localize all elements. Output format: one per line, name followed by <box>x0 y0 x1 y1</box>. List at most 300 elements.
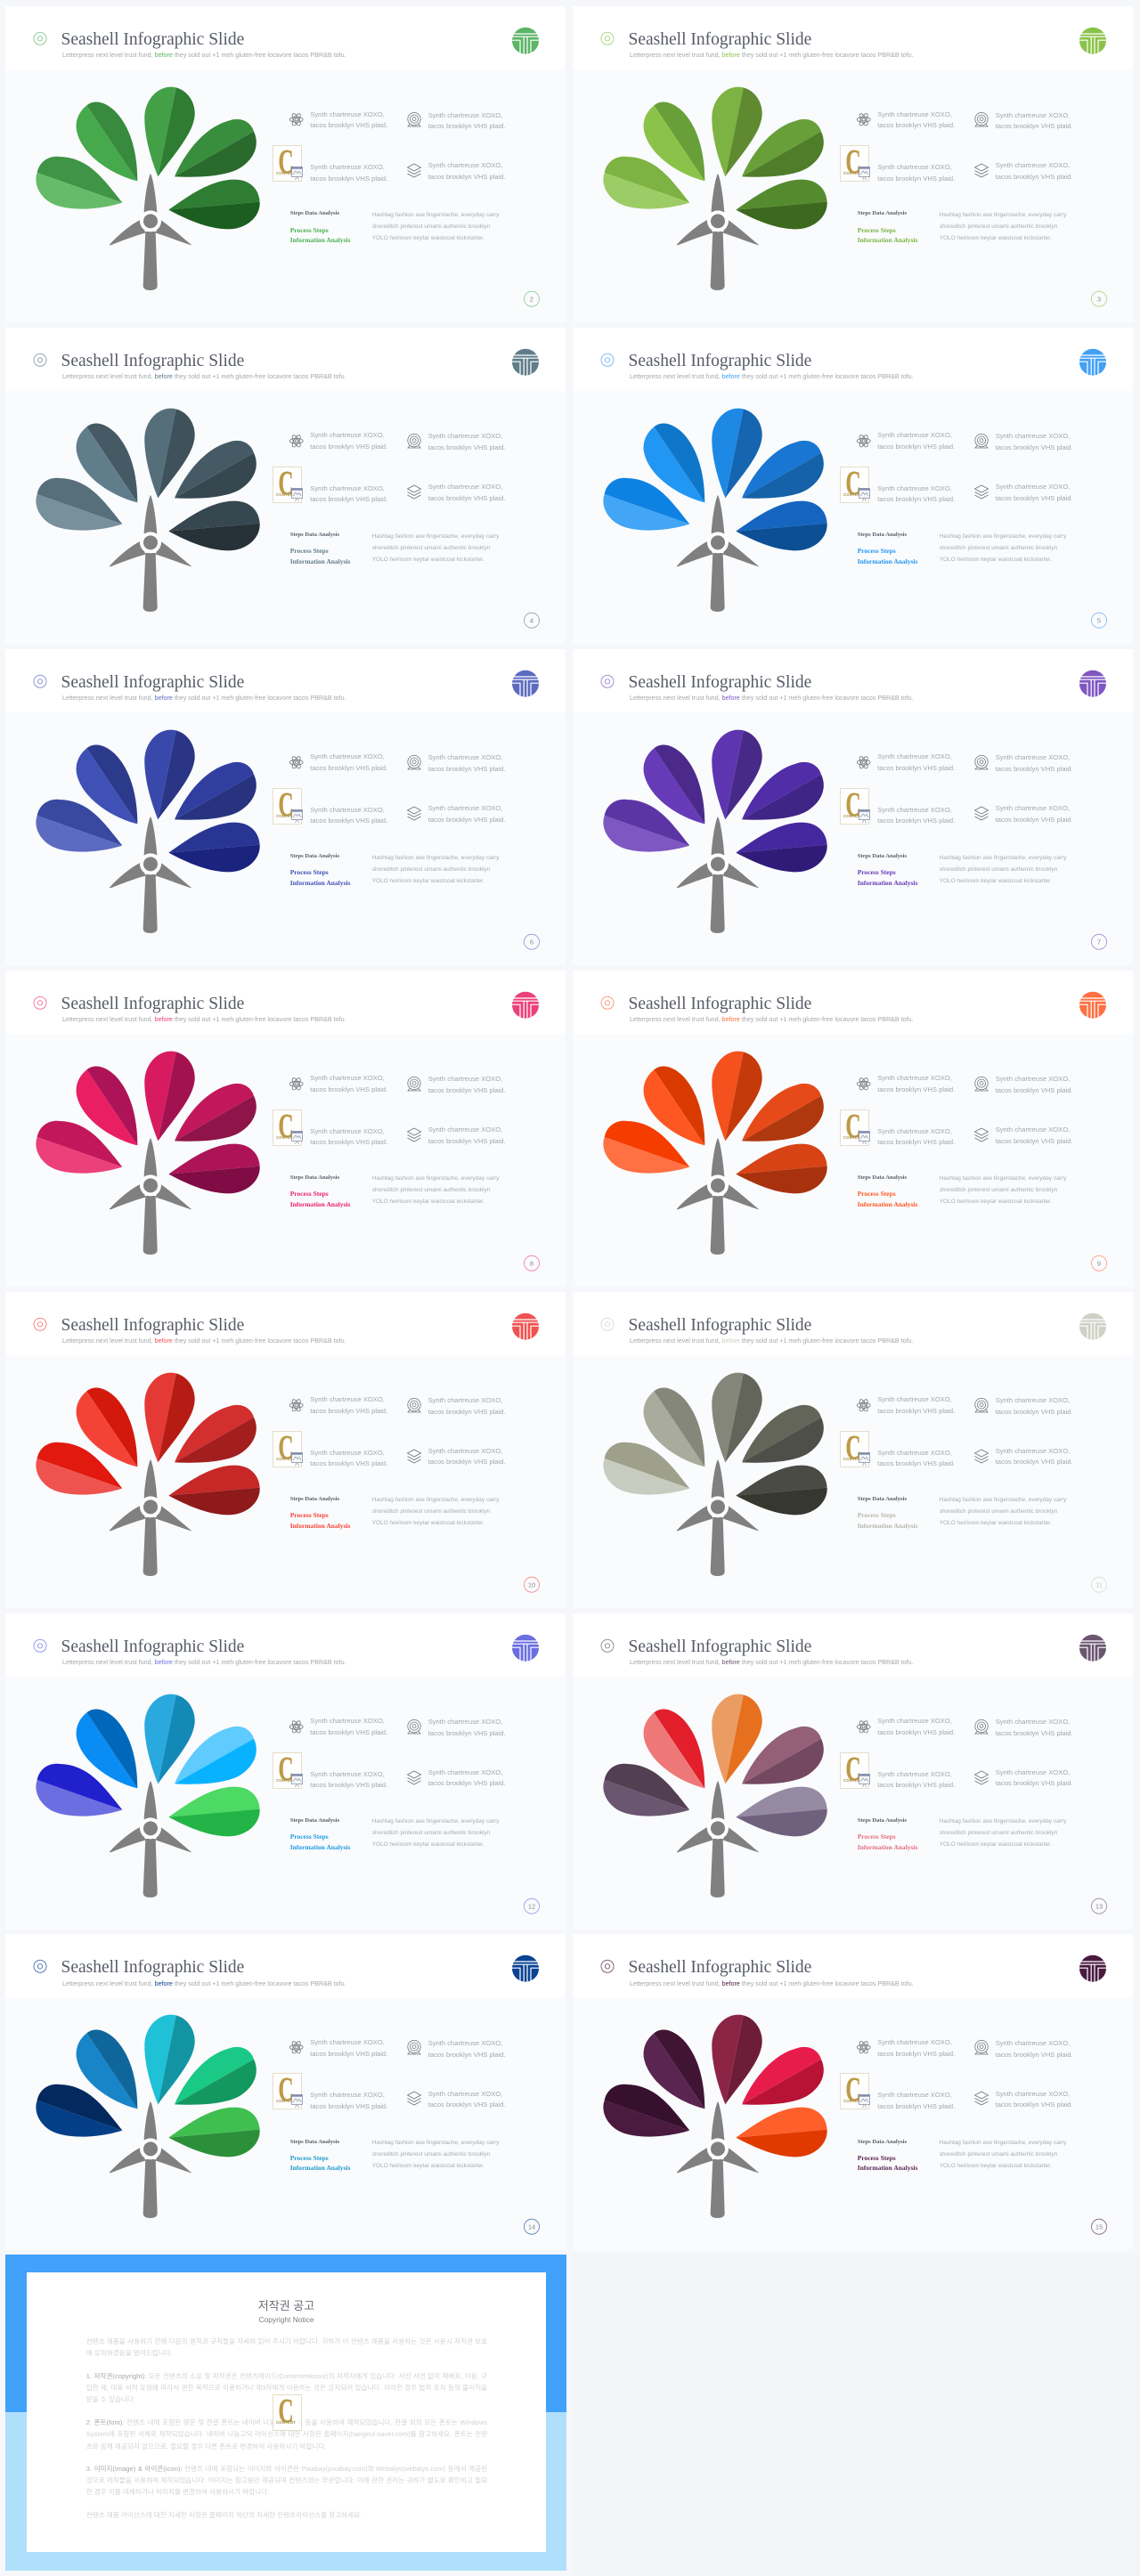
feature text 2 <box>428 1074 506 1096</box>
petal 4 <box>742 119 824 177</box>
feature text 1 <box>310 2037 387 2060</box>
heading: Seashell Infographic Slide <box>61 995 244 1013</box>
feature text 1: tacos brooklyn VHS plaid. <box>877 2050 955 2058</box>
icon: header ring <box>601 353 614 366</box>
feature text 3: tacos brooklyn VHS plaid. <box>310 175 387 183</box>
feature text 1: Synth chartreuse XOXO, <box>877 1395 952 1403</box>
process labels: Process Steps <box>290 547 329 555</box>
watermark thumbnail: CONTENT <box>276 1777 296 1783</box>
turbine <box>677 174 759 290</box>
paragraph: shoreditch pinterest umami authentic brooklyn <box>940 1508 1057 1515</box>
heading: Seashell Infographic Slide <box>629 30 811 49</box>
paragraph: Hashtag fashion axe fingerstache, everyday carry <box>940 1497 1066 1503</box>
icon: layers <box>974 1770 989 1784</box>
page number badge <box>524 1577 540 1592</box>
petal 2 <box>77 744 137 824</box>
watermark thumbnail: CONTENT <box>843 1135 863 1140</box>
icon: header ring <box>34 1961 46 1973</box>
feature text 1 <box>877 431 955 451</box>
icon: atom <box>857 434 870 448</box>
petal 5 <box>168 822 260 872</box>
petal 2 <box>644 102 704 181</box>
process labels: Information Analysis <box>290 1200 350 1208</box>
feature text 2 <box>428 432 506 451</box>
feature text 3 <box>877 163 955 183</box>
paragraph: shoreditch pinterest umami authentic brooklyn <box>372 545 490 551</box>
petal 5 <box>736 180 827 229</box>
turbine <box>110 1459 191 1576</box>
feature text 4 <box>996 161 1073 181</box>
process labels: Process Steps <box>290 1190 329 1198</box>
feature text 2 <box>996 111 1073 130</box>
paragraph <box>940 1494 1066 1529</box>
watermark thumbnail: C <box>845 465 860 502</box>
header band <box>573 6 1133 69</box>
paragraph: YOLO heirloom keytar waistcoat kickstarter. <box>372 878 484 884</box>
feature text 2 <box>996 752 1073 776</box>
page number badge <box>1092 1898 1106 1914</box>
page number badge: 6 <box>530 938 533 946</box>
page number badge <box>1092 613 1106 628</box>
feature text 1: Synth chartreuse XOXO, <box>310 2038 385 2046</box>
header band <box>573 1934 1133 1997</box>
process labels <box>290 1189 350 1209</box>
page number badge: 8 <box>530 1259 533 1267</box>
steps heading: Steps Data Analysis <box>290 532 339 538</box>
petal 5 <box>168 501 260 550</box>
paragraph: shoreditch pinterest umami authentic brooklyn <box>372 2151 490 2158</box>
slide 5: blue <box>573 328 1133 629</box>
paragraph: shoreditch pinterest umami authentic brooklyn <box>940 866 1057 873</box>
slide 15: maroon <box>567 1928 1137 2249</box>
icon: layers <box>974 164 989 177</box>
paragraph: YOLO heirloom keytar waistcoat kickstarter. <box>940 235 1052 241</box>
process labels: Process Steps <box>858 1511 896 1519</box>
page number badge: 4 <box>530 616 533 624</box>
feature text 2: tacos brooklyn VHS plaid. <box>996 1086 1073 1094</box>
paragraph <box>372 852 499 887</box>
chart: wind-turbine petal tree <box>36 1372 260 1576</box>
paragraph: YOLO heirloom keytar waistcoat kickstarter. <box>940 557 1052 563</box>
feature text 2: tacos brooklyn VHS plaid. <box>428 1086 506 1094</box>
petal 2 <box>644 1709 704 1788</box>
white notice card <box>27 2272 546 2552</box>
icon: target <box>975 112 988 126</box>
feature text 3: Synth chartreuse XOXO, <box>310 1770 385 1777</box>
petal 4 <box>175 2047 256 2105</box>
feature text 3: tacos brooklyn VHS plaid. <box>310 1781 387 1789</box>
heading: Seashell Infographic Slide <box>61 30 244 49</box>
paragraph: Hashtag fashion axe fingerstache, everyday carry <box>372 1175 499 1182</box>
feature text 3: Synth chartreuse XOXO, <box>877 1127 952 1135</box>
petal 3 <box>712 1694 762 1784</box>
icon: header ring <box>601 675 614 687</box>
subtitle: Letterpress next level trust fund, before they sold out +1 meh gluten-free locavore tacos PBR&B tofu. <box>62 52 346 59</box>
slide graphics: icons, tree, badge <box>600 349 1107 629</box>
watermark thumbnail <box>840 145 869 182</box>
watermark thumbnail <box>840 1431 869 1467</box>
feature text 2: Synth chartreuse XOXO, <box>996 1718 1070 1726</box>
paragraph: YOLO heirloom keytar waistcoat kickstarter. <box>940 878 1052 884</box>
paragraph: shoreditch pinterest umami authentic brooklyn <box>940 1187 1057 1193</box>
subtitle: Letterpress next level trust fund, before they sold out +1 meh gluten-free locavore tacos PBR&B tofu. <box>630 1659 914 1666</box>
feature text 4: Synth chartreuse XOXO, <box>428 1125 502 1134</box>
feature text 1: tacos brooklyn VHS plaid. <box>310 2050 387 2058</box>
process labels <box>290 226 351 244</box>
feature text 2: Synth chartreuse XOXO, <box>996 432 1070 440</box>
feature text 1: tacos brooklyn VHS plaid. <box>877 1407 955 1415</box>
logo <box>511 1312 540 1341</box>
icon: atom <box>289 112 303 126</box>
petal 5 <box>168 1786 260 1836</box>
steps heading: Steps Data Analysis <box>858 532 907 538</box>
icon: target <box>408 2041 420 2054</box>
paragraph <box>940 212 1067 241</box>
watermark thumbnail: CONTENT <box>843 1457 863 1461</box>
watermark thumbnail: C <box>845 2071 860 2109</box>
paragraph <box>372 1494 499 1529</box>
paragraph: Hashtag fashion axe fingerstache, everyday carry <box>372 1818 499 1824</box>
feature text 1: Synth chartreuse XOXO, <box>310 431 385 439</box>
feature text 3 <box>877 805 955 827</box>
logo <box>1079 1312 1107 1341</box>
process labels: Process Steps <box>858 1190 896 1198</box>
feature text 3: tacos brooklyn VHS plaid. <box>310 1459 387 1467</box>
watermark thumbnail: CONTENT <box>276 2420 296 2425</box>
page number badge <box>524 291 540 306</box>
petal 2 <box>77 1387 137 1467</box>
feature text 4 <box>996 1767 1073 1790</box>
turbine <box>677 1459 759 1576</box>
feature text 4: Synth chartreuse XOXO, <box>996 1768 1070 1776</box>
feature text 3: Synth chartreuse XOXO, <box>310 806 385 814</box>
logo <box>1079 1634 1107 1662</box>
page number badge <box>1092 934 1106 949</box>
feature text 1: Synth chartreuse XOXO, <box>877 1717 952 1725</box>
process labels: Process Steps <box>858 1832 896 1841</box>
chart: wind-turbine petal tree <box>603 2015 827 2218</box>
panel background: blue top <box>5 2255 566 2412</box>
feature text 1 <box>310 110 387 129</box>
feature text 2 <box>996 1395 1073 1418</box>
paragraph: YOLO heirloom keytar waistcoat kickstarter. <box>940 2163 1052 2169</box>
notice item 2: 2. 폰트(font): 컨텐츠 내에 포함된 영문 및 한글 폰트는 네이버 나눔고딕 서체 등을 사용하여 제작되었습니다. 한글 외의 모든 폰트는 Windows System에 포함된 서체로 제작되었습니다. 네이버 나눔고딕 라이선스에 대한 사항은 홈페이지(hangeul.naver.com)를 참고하세요. 폰트는 컨텐츠와 함께 제공되지 않으므로, 필요할 경우 다른 폰트로 변경하여 사용하시기 바랍니다. <box>86 2418 487 2450</box>
petal 1 <box>603 1120 689 1173</box>
feature text 3 <box>877 1768 955 1792</box>
feature text 3: tacos brooklyn VHS plaid. <box>877 817 955 825</box>
subtitle: Letterpress next level trust fund, before they sold out +1 meh gluten-free locavore tacos PBR&B tofu. <box>62 1980 346 1987</box>
feature text 4 <box>428 1767 506 1790</box>
paragraph <box>372 1173 499 1207</box>
feature text 4: tacos brooklyn VHS plaid. <box>996 494 1073 502</box>
header band <box>5 971 566 1034</box>
steps heading: Steps Data Analysis <box>290 210 339 216</box>
feature text 2 <box>428 1717 506 1739</box>
feature text 4 <box>996 1446 1073 1468</box>
turbine <box>110 1780 191 1897</box>
feature text 1 <box>310 752 387 772</box>
watermark thumbnail <box>273 1431 302 1467</box>
feature text 1: Synth chartreuse XOXO, <box>310 1395 385 1403</box>
feature text 3: Synth chartreuse XOXO, <box>877 806 952 814</box>
header band <box>5 1292 566 1355</box>
paragraph: shoreditch pinterest umami authentic brooklyn <box>940 1830 1057 1836</box>
paragraph <box>940 1816 1066 1850</box>
page number badge <box>524 1898 540 1914</box>
petal 1 <box>36 1120 122 1173</box>
steps heading: Steps Data Analysis <box>290 853 339 859</box>
petal 4 <box>742 762 824 820</box>
watermark thumbnail: CONTENT <box>843 2099 863 2103</box>
icon: layers <box>408 164 420 177</box>
watermark thumbnail: CONTENT <box>843 814 863 818</box>
process labels <box>290 867 350 888</box>
process labels: Information Analysis <box>290 236 350 244</box>
chart: wind-turbine petal tree <box>36 409 260 612</box>
petal 5 <box>736 1786 827 1836</box>
process labels: Process Steps <box>290 2154 329 2162</box>
paragraph: Hashtag fashion axe fingerstache, everyday carry <box>940 855 1066 861</box>
logo <box>1079 991 1107 1020</box>
feature text 1: tacos brooklyn VHS plaid. <box>877 764 955 772</box>
feature text 3 <box>310 1448 387 1470</box>
feature text 4: Synth chartreuse XOXO, <box>428 804 502 812</box>
feature text 2: tacos brooklyn VHS plaid. <box>428 443 506 451</box>
watermark thumbnail: C <box>845 1751 860 1788</box>
icon: atom <box>857 112 870 126</box>
petal 2 <box>77 423 137 502</box>
paragraph: shoreditch pinterest umami authentic brooklyn <box>372 1830 490 1836</box>
feature text 2: Synth chartreuse XOXO, <box>428 1396 502 1404</box>
petal 2 <box>644 423 704 502</box>
page number badge <box>524 2220 540 2235</box>
feature text 4: tacos brooklyn VHS plaid. <box>428 2101 506 2109</box>
feature text 4 <box>428 2089 506 2111</box>
logo <box>1079 349 1107 377</box>
subtitle: Letterpress next level trust fund, before they sold out +1 meh gluten-free locavore tacos PBR&B tofu. <box>630 1337 914 1345</box>
subtitle: Letterpress next level trust fund, before they sold out +1 meh gluten-free locavore tacos PBR&B tofu. <box>62 373 346 380</box>
paragraph <box>940 2137 1066 2172</box>
feature text 2: Synth chartreuse XOXO, <box>428 2039 502 2047</box>
process labels: Process Steps <box>290 1832 329 1841</box>
paragraph: Hashtag fashion axe fingerstache, everyday carry <box>940 533 1066 540</box>
watermark thumbnail <box>840 788 869 825</box>
feature text 4 <box>996 1125 1073 1147</box>
subtitle: Letterpress next level trust fund, before they sold out +1 meh gluten-free locavore tacos PBR&B tofu. <box>630 373 914 380</box>
page number badge: 3 <box>1097 295 1101 303</box>
feature text 4: tacos brooklyn VHS plaid. <box>996 1779 1073 1787</box>
steps heading: Steps Data Analysis <box>290 1174 339 1181</box>
heading: Seashell Infographic Slide <box>629 995 811 1013</box>
slide graphics: icons, tree, badge <box>567 1606 1137 1932</box>
feature text 1 <box>310 1716 387 1738</box>
paragraph: YOLO heirloom keytar waistcoat kickstarter. <box>372 557 484 563</box>
feature text 1: Synth chartreuse XOXO, <box>310 1717 385 1725</box>
petal 3 <box>144 1694 195 1784</box>
logo <box>511 1955 540 1983</box>
watermark thumbnail <box>840 1109 869 1146</box>
feature text 4: Synth chartreuse XOXO, <box>996 161 1070 169</box>
process labels <box>290 547 351 565</box>
paragraph: YOLO heirloom keytar waistcoat kickstarter. <box>940 1520 1052 1526</box>
petal 4 <box>742 441 824 499</box>
icon: layers <box>408 1450 420 1463</box>
feature text 3: Synth chartreuse XOXO, <box>877 163 952 171</box>
icon: header ring <box>601 1961 614 1973</box>
process labels: Process Steps <box>858 868 896 876</box>
process labels: Information Analysis <box>290 2164 350 2172</box>
paragraph: Hashtag fashion axe fingerstache, everyday carry <box>940 1175 1066 1182</box>
petal 3 <box>144 1372 195 1462</box>
page number badge: 5 <box>1097 616 1101 624</box>
icon: target <box>975 1398 988 1412</box>
feature text 1 <box>877 110 955 129</box>
slide 12: multi blue <box>0 1606 570 1929</box>
notice closing line: 컨텐츠 제품 라이선스에 대한 자세한 사항은 홈페이지 하단의 자세한 컨텐츠라이선스를 참고하세요. <box>86 2511 362 2519</box>
notice intro: 컨텐츠 제품을 사용하기 전에 다음의 원칙과 규칙들을 자세히 읽어 주시기 바랍니다. 귀하가 이 컨텐츠 제품을 사용하는 것은 사용시 저작권 보호에 유의하겠음을 알려드립니다. <box>86 2337 487 2357</box>
feature text 4: Synth chartreuse XOXO, <box>996 483 1070 491</box>
feature text 4 <box>428 803 506 825</box>
feature text 3: tacos brooklyn VHS plaid. <box>877 1781 955 1789</box>
feature text 1: Synth chartreuse XOXO, <box>877 2038 952 2046</box>
petal 5 <box>168 2108 260 2158</box>
watermark thumbnail <box>840 467 869 503</box>
process labels <box>857 547 917 565</box>
icon: target <box>408 112 420 126</box>
feature text 3: Synth chartreuse XOXO, <box>310 163 385 171</box>
steps heading: Steps Data Analysis <box>858 2139 907 2145</box>
petal 1 <box>36 1442 122 1494</box>
icon: layers <box>408 2092 420 2105</box>
page number badge: 10 <box>528 1581 535 1589</box>
icon: header ring <box>34 353 46 366</box>
paragraph: shoreditch pinterest umami authentic brooklyn <box>940 545 1057 551</box>
process labels: Information Analysis <box>858 2164 917 2172</box>
watermark thumbnail <box>273 1752 302 1788</box>
chart: wind-turbine petal tree <box>36 2015 260 2218</box>
feature text 2 <box>428 111 506 130</box>
chart: wind-turbine petal tree <box>603 1372 827 1576</box>
watermark thumbnail: CONTENT <box>276 2099 296 2103</box>
feature text 1: tacos brooklyn VHS plaid. <box>310 1085 387 1093</box>
page number badge: 15 <box>1095 2223 1103 2231</box>
paragraph: YOLO heirloom keytar waistcoat kickstarter. <box>940 1841 1052 1848</box>
feature text 3: tacos brooklyn VHS plaid. <box>877 175 955 183</box>
slide 4: slate <box>5 328 566 629</box>
feature text 2: tacos brooklyn VHS plaid. <box>996 1408 1073 1416</box>
feature text 3: tacos brooklyn VHS plaid. <box>877 2102 955 2110</box>
feature text 3: Synth chartreuse XOXO, <box>310 1449 385 1457</box>
petal 3 <box>144 87 195 176</box>
paragraph: shoreditch pinterest umami authentic brooklyn <box>372 866 490 873</box>
feature text 4: tacos brooklyn VHS plaid. <box>428 1779 506 1787</box>
steps heading: Steps Data Analysis <box>858 1817 907 1824</box>
icon: target <box>975 434 988 448</box>
process labels: Information Analysis <box>858 1843 917 1850</box>
feature text 2 <box>428 1395 506 1418</box>
process labels <box>290 1832 350 1852</box>
header band <box>573 1292 1133 1355</box>
paragraph: shoreditch pinterest umami authentic brooklyn <box>372 1508 490 1515</box>
turbine <box>110 1138 191 1255</box>
slide graphics: icons, tree, badge <box>567 643 1137 968</box>
process labels: Process Steps <box>858 2154 896 2162</box>
feature text 2: Synth chartreuse XOXO, <box>996 1396 1070 1404</box>
turbine <box>110 2101 191 2218</box>
slide graphics: icons, tree, badge <box>0 1606 570 1932</box>
process labels <box>858 1832 917 1852</box>
slide 11: taupe <box>567 1286 1137 1607</box>
paragraph: Hashtag fashion axe fingerstache, everyday carry <box>372 212 499 218</box>
feature text 1: tacos brooklyn VHS plaid. <box>310 764 387 772</box>
petal 2 <box>644 1387 704 1467</box>
paragraph <box>372 533 499 563</box>
paragraph <box>940 852 1066 887</box>
feature text 3: Synth chartreuse XOXO, <box>877 1770 952 1777</box>
process labels: Process Steps <box>290 1511 329 1519</box>
icon: target <box>408 434 420 448</box>
slide graphics: icons, tree, badge <box>34 27 540 307</box>
subtitle: Letterpress next level trust fund, before they sold out +1 meh gluten-free locavore tacos PBR&B tofu. <box>630 1980 914 1987</box>
feature text 3: Synth chartreuse XOXO, <box>310 484 385 492</box>
feature text 1: Synth chartreuse XOXO, <box>877 431 952 439</box>
slide 2: green <box>5 6 566 307</box>
feature text 1 <box>310 431 387 451</box>
watermark thumbnail <box>273 145 302 182</box>
icon: header ring <box>601 996 614 1009</box>
icon: atom <box>289 755 303 769</box>
petal 4 <box>175 119 256 177</box>
heading: Seashell Infographic Slide <box>61 1958 244 1977</box>
feature text 3: tacos brooklyn VHS plaid. <box>877 495 955 503</box>
process labels <box>858 1189 917 1209</box>
petal 1 <box>603 1442 689 1494</box>
process labels: Process Steps <box>858 547 896 555</box>
chart: wind-turbine petal tree <box>36 1694 260 1897</box>
feature text 3: Synth chartreuse XOXO, <box>877 1449 952 1457</box>
steps heading: Steps Data Analysis <box>858 1174 907 1181</box>
slide 6: indigo <box>5 649 566 950</box>
feature text 3 <box>310 163 387 183</box>
paragraph: Hashtag fashion axe fingerstache, everyday carry <box>940 2140 1066 2146</box>
feature text 1: tacos brooklyn VHS plaid. <box>310 1407 387 1415</box>
feature text 1 <box>877 2037 955 2060</box>
empty cell background <box>573 2254 1140 2576</box>
watermark thumbnail: C <box>845 1108 860 1145</box>
notice title: 저작권 공고 <box>258 2299 314 2312</box>
feature text 2 <box>996 432 1073 451</box>
feature text 4: Synth chartreuse XOXO, <box>996 1447 1070 1455</box>
slide graphics: icons, tree, badge <box>567 1286 1137 1611</box>
watermark thumbnail <box>840 2073 869 2109</box>
feature text 3 <box>310 2090 387 2113</box>
petal 2 <box>77 102 137 181</box>
watermark thumbnail <box>273 467 302 503</box>
feature text 2: Synth chartreuse XOXO, <box>996 2039 1070 2047</box>
icon: header ring <box>601 1318 614 1330</box>
feature text 1 <box>877 1073 955 1095</box>
petal 5 <box>168 1465 260 1515</box>
feature text 1 <box>877 1394 955 1417</box>
paragraph: shoreditch pinterest umami authentic brooklyn <box>372 223 490 230</box>
petal 3 <box>144 729 195 819</box>
process labels: Information Analysis <box>858 1200 917 1208</box>
icon: target <box>408 1719 420 1733</box>
petal 1 <box>603 800 689 851</box>
slide graphics: icons, tree, badge <box>34 670 540 950</box>
subtitle: Letterpress next level trust fund, before they sold out +1 meh gluten-free locavore tacos PBR&B tofu. <box>62 1659 346 1666</box>
process labels: Information Analysis <box>290 1843 350 1850</box>
